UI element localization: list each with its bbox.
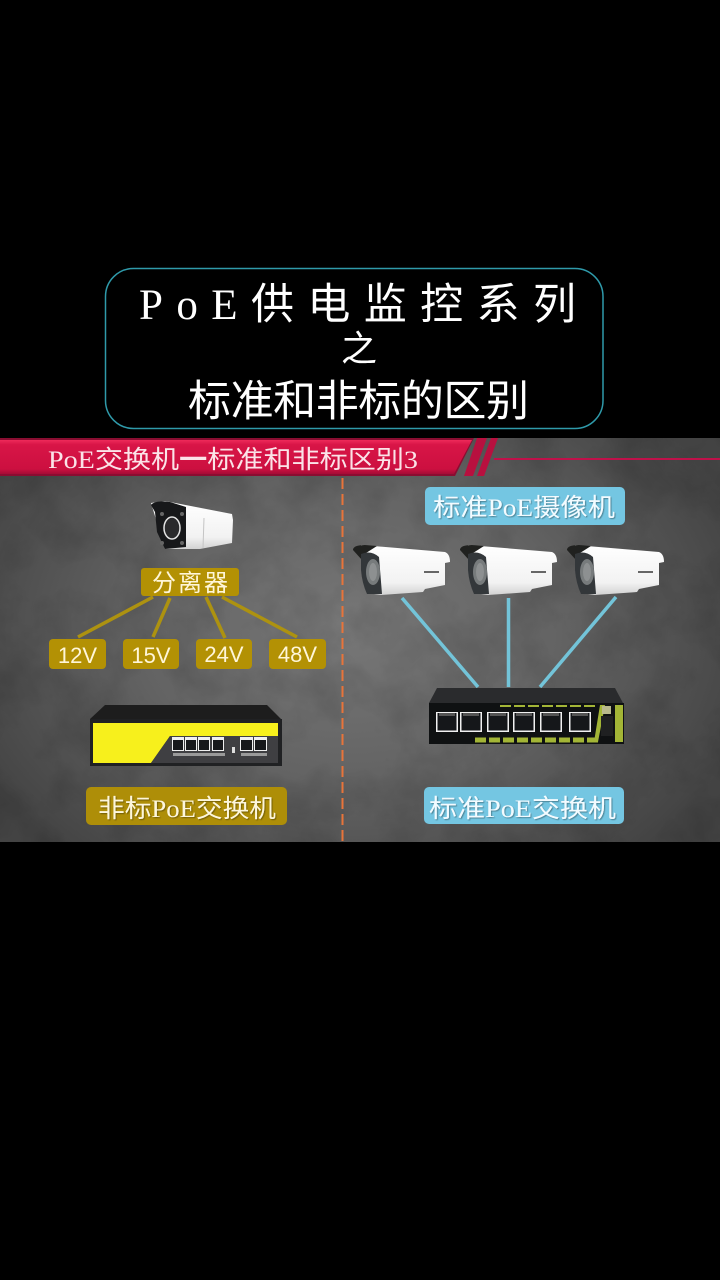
icon: standard switch: [429, 688, 624, 744]
label: 15V: 15V: [131, 643, 171, 668]
icon: camera 3: [567, 545, 664, 595]
connector lines: splitter to voltages: [78, 597, 297, 638]
header banner: [0, 438, 720, 476]
label: standard PoE camera: 标准PoE摄像机: [433, 494, 615, 522]
dashed divider: [342, 478, 344, 842]
icon: camera 1: [353, 545, 450, 595]
label: splitter: 分离器: [152, 570, 228, 597]
label: standard PoE switch: 标准PoE交换机: [429, 795, 616, 823]
slide background: [0, 438, 720, 842]
connector lines: cameras to switch: [402, 597, 616, 687]
title connector: 之: [341, 328, 377, 369]
label: standard PoE camera: [425, 487, 625, 525]
icon: non-standard camera: [151, 501, 233, 549]
label: non-standard PoE switch: [86, 787, 287, 825]
title panel: [106, 268, 603, 428]
panel: non-standard PoE: [49, 501, 326, 825]
label: non-standard PoE switch: 非标PoE交换机: [98, 795, 276, 823]
icon: camera 2: [460, 545, 557, 595]
label: 24V: [196, 639, 252, 669]
title line 3: 标准和非标的区别: [188, 378, 529, 426]
label: 24V: 24V: [204, 642, 244, 667]
label: 12V: [49, 639, 106, 669]
panel: comparison slide: [0, 438, 720, 842]
switch ports: [436, 712, 591, 732]
panel: standard PoE: [353, 487, 664, 824]
title frame: [106, 268, 603, 428]
label: standard PoE switch: [424, 787, 624, 824]
icon: non-standard switch: [90, 705, 282, 766]
label: 15V: [123, 639, 179, 669]
label: 48V: 48V: [278, 642, 317, 667]
title line 1: PoE供电监控系列: [139, 282, 576, 329]
label: 48V: [269, 639, 326, 669]
label: 12V: 12V: [58, 643, 97, 668]
header text: PoE交换机 一标准和非标区别3: [48, 446, 418, 474]
